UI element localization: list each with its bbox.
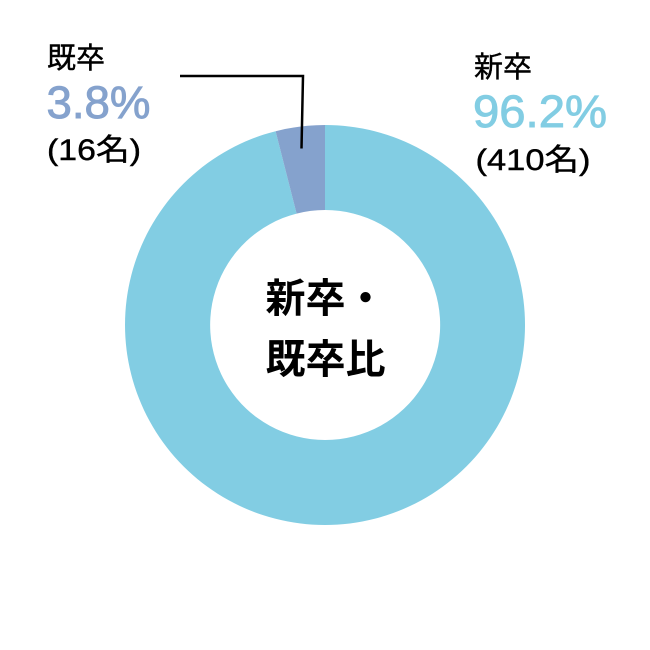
center title: 既卒比 — [266, 338, 386, 382]
label: new graduates: 新卒 — [474, 52, 532, 84]
label: new graduates: (410名) — [476, 144, 590, 177]
label: experienced hires: (16名) — [47, 134, 141, 167]
label: new graduates — [473, 52, 607, 177]
label: experienced hires: 既卒 — [47, 43, 105, 75]
segment: new graduates 96.2% — [125, 125, 525, 525]
leader line — [180, 76, 303, 148]
donut chart — [125, 125, 525, 525]
segment: experienced hires 3.8% — [276, 125, 325, 214]
center title: 新卒・ — [266, 277, 386, 321]
label: experienced hires: 3.8% — [46, 77, 150, 128]
label: experienced hires — [46, 43, 150, 167]
label: new graduates: 96.2% — [473, 86, 607, 137]
center title — [266, 277, 386, 382]
